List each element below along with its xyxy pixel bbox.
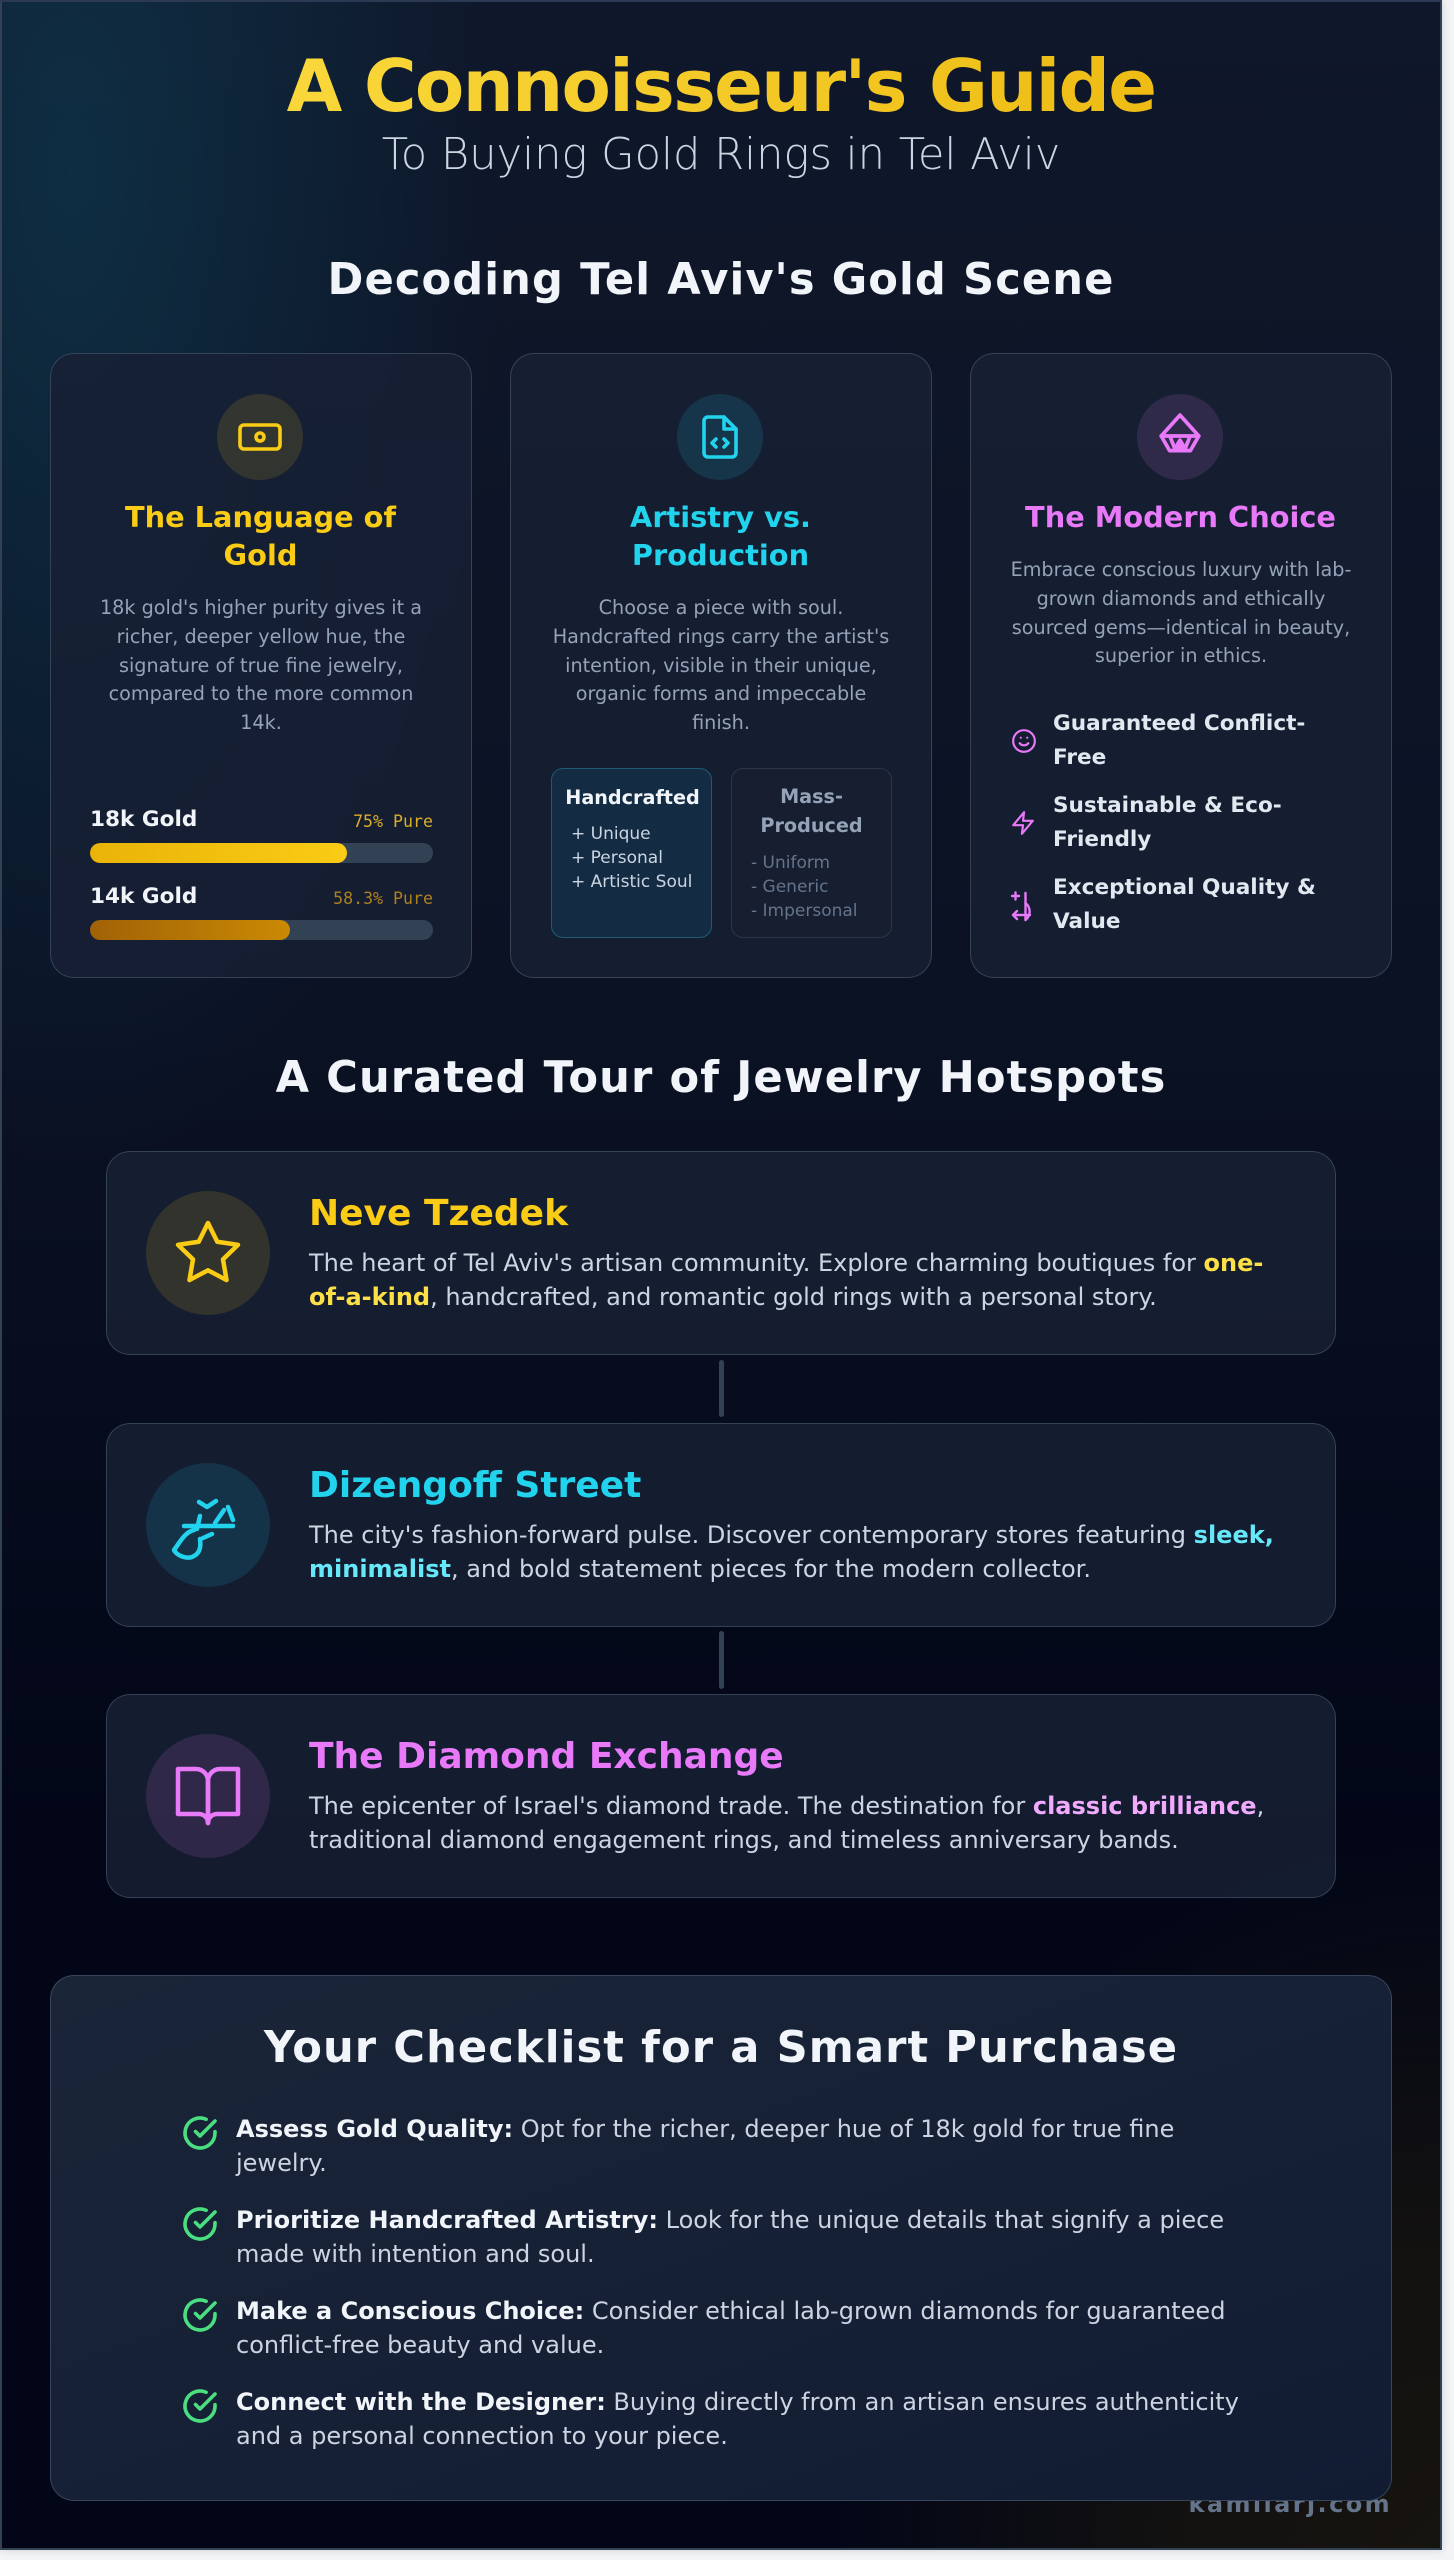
description: compared to the more common bbox=[109, 682, 413, 705]
heading: Gold bbox=[224, 538, 297, 572]
text bbox=[1053, 793, 1282, 852]
icon: check bbox=[183, 2207, 217, 2241]
location: diamond exchange bbox=[106, 1694, 1336, 1898]
description bbox=[553, 596, 889, 734]
heading: Handcrafted bbox=[565, 786, 700, 809]
text bbox=[1053, 875, 1316, 934]
description: Handcrafted rings carry the artist's bbox=[553, 625, 889, 648]
checklist item: designer bbox=[183, 2388, 1239, 2450]
subtitle: To Buying Gold Rings in Tel Aviv bbox=[382, 130, 1060, 180]
heading: Neve Tzedek bbox=[309, 1193, 568, 1234]
location: dizengoff street bbox=[106, 1423, 1336, 1627]
text: Make a Conscious Choice: Consider ethical lab-grown diamonds for guaranteed bbox=[236, 2297, 1225, 2325]
heading bbox=[760, 785, 863, 837]
description: finish. bbox=[692, 711, 750, 734]
icon: bolt bbox=[1012, 811, 1034, 835]
heading: Produced bbox=[760, 814, 863, 837]
text bbox=[236, 2206, 1224, 2268]
list: - Impersonal bbox=[751, 901, 858, 921]
icon: star bbox=[146, 1191, 270, 1315]
icon: brush bbox=[146, 1463, 270, 1587]
text bbox=[236, 2115, 1174, 2177]
title bbox=[2, 44, 1440, 128]
description: superior in ethics. bbox=[1095, 644, 1267, 667]
description: traditional diamond engagement rings, and timeless anniversary bands. bbox=[309, 1826, 1179, 1854]
description bbox=[308, 1792, 1264, 1854]
description: Choose a piece with soul. bbox=[599, 596, 843, 619]
heading bbox=[125, 500, 396, 572]
text: Sustainable & Eco- bbox=[1053, 793, 1282, 818]
description bbox=[100, 596, 422, 734]
description: The heart of Tel Aviv's artisan community. Explore charming boutiques for one- bbox=[309, 1249, 1263, 1277]
heading: The Diamond Exchange bbox=[309, 1736, 784, 1777]
panel: checklist bbox=[50, 1975, 1392, 2501]
icon: check bbox=[183, 2298, 217, 2332]
icon: open book bbox=[146, 1734, 270, 1858]
icon: check bbox=[183, 2389, 217, 2423]
text: Friendly bbox=[1053, 827, 1151, 852]
text: Prioritize Handcrafted Artistry: Look for the unique details that signify a piece bbox=[236, 2206, 1224, 2234]
list: + Unique bbox=[571, 824, 651, 844]
panel: artistry vs production bbox=[510, 353, 932, 978]
heading: tour section: A Curated Tour of Jewelry Hotspots bbox=[276, 1053, 1166, 1103]
heading: decoding section: Decoding Tel Aviv's Gold Scene bbox=[328, 255, 1114, 305]
checklist item: artistry bbox=[183, 2206, 1224, 2268]
list bbox=[571, 824, 692, 892]
icon: banknote bbox=[217, 394, 303, 480]
description: minimalist, and bold statement pieces for the modern collector. bbox=[309, 1555, 1091, 1583]
list: - Generic bbox=[751, 877, 828, 897]
title: A Connoisseur's Guide bbox=[287, 44, 1155, 128]
location: neve tzedek bbox=[106, 1151, 1336, 1355]
text: Exceptional Quality & bbox=[1053, 875, 1316, 900]
text: Assess Gold Quality: Opt for the richer, deeper hue of 18k gold for true fine bbox=[236, 2115, 1174, 2143]
label: 14k gold: 14k Gold bbox=[90, 884, 197, 909]
connector bbox=[719, 1360, 724, 1417]
description: sourced gems—identical in beauty, bbox=[1012, 616, 1350, 639]
heading: Artistry vs. bbox=[630, 500, 811, 534]
description bbox=[308, 1521, 1274, 1583]
text bbox=[236, 2388, 1239, 2450]
comparison: handcrafted bbox=[551, 768, 712, 938]
heading: The Language of bbox=[125, 500, 396, 534]
description: intention, visible in their unique, bbox=[565, 654, 877, 677]
text: conflict-free beauty and value. bbox=[236, 2331, 604, 2359]
text: Free bbox=[1053, 745, 1106, 770]
icon: gem bbox=[1137, 394, 1223, 480]
icon: smile bbox=[1012, 729, 1036, 753]
bar: 14k bbox=[90, 920, 433, 940]
text: jewelry. bbox=[236, 2149, 327, 2177]
list: + Personal bbox=[571, 848, 663, 868]
heading: The Modern Choice bbox=[1025, 500, 1336, 534]
purity: 18k: 75% Pure bbox=[353, 812, 433, 831]
feature: conflict free bbox=[1012, 711, 1305, 770]
text: Guaranteed Conflict- bbox=[1053, 711, 1305, 736]
checklist item: conscious choice bbox=[183, 2297, 1225, 2359]
icon: file code bbox=[677, 394, 763, 480]
checklist item: gold quality bbox=[183, 2115, 1174, 2177]
heading: Mass- bbox=[780, 785, 843, 808]
bar: 18k bbox=[90, 843, 433, 863]
description: 14k. bbox=[240, 711, 282, 734]
description: Embrace conscious luxury with lab- bbox=[1011, 558, 1351, 581]
list: + Artistic Soul bbox=[571, 872, 692, 892]
panel: the language of gold bbox=[50, 353, 472, 978]
heading: Production bbox=[632, 538, 809, 572]
text bbox=[236, 2297, 1225, 2359]
comparison: mass produced bbox=[731, 768, 892, 938]
list: - Uniform bbox=[751, 853, 830, 873]
feature: quality bbox=[1010, 875, 1316, 934]
heading bbox=[630, 500, 811, 572]
checklist heading: Your Checklist for a Smart Purchase bbox=[264, 2023, 1178, 2073]
description: signature of true fine jewelry, bbox=[119, 654, 403, 677]
purity: 14k: 58.3% Pure bbox=[333, 889, 433, 908]
description: The epicenter of Israel's diamond trade. The destination for classic brilliance, bbox=[309, 1792, 1264, 1820]
feature: sustainable bbox=[1012, 793, 1282, 852]
label: 18k gold: 18k Gold bbox=[90, 807, 197, 832]
text bbox=[1053, 711, 1305, 770]
text: Connect with the Designer: Buying directly from an artisan ensures authenticity bbox=[236, 2388, 1239, 2416]
description: The city's fashion-forward pulse. Discover contemporary stores featuring sleek, bbox=[309, 1521, 1274, 1549]
text: and a personal connection to your piece. bbox=[236, 2422, 728, 2450]
list bbox=[751, 853, 858, 921]
description: grown diamonds and ethically bbox=[1037, 587, 1325, 610]
description bbox=[1011, 558, 1351, 667]
panel: the modern choice bbox=[970, 353, 1392, 978]
text: Value bbox=[1053, 909, 1121, 934]
description: 18k gold's higher purity gives it a bbox=[100, 596, 422, 619]
connector bbox=[719, 1631, 724, 1689]
description: organic forms and impeccable bbox=[576, 682, 866, 705]
icon: sparkle wand bbox=[1010, 891, 1032, 922]
watermark: kamilarj.com bbox=[1188, 2490, 1392, 2518]
heading: Dizengoff Street bbox=[309, 1465, 641, 1506]
text: made with intention and soul. bbox=[236, 2240, 595, 2268]
description bbox=[308, 1249, 1263, 1311]
description: of-a-kind, handcrafted, and romantic gold rings with a personal story. bbox=[309, 1283, 1157, 1311]
description: richer, deeper yellow hue, the bbox=[117, 625, 405, 648]
icon: check bbox=[183, 2116, 217, 2150]
